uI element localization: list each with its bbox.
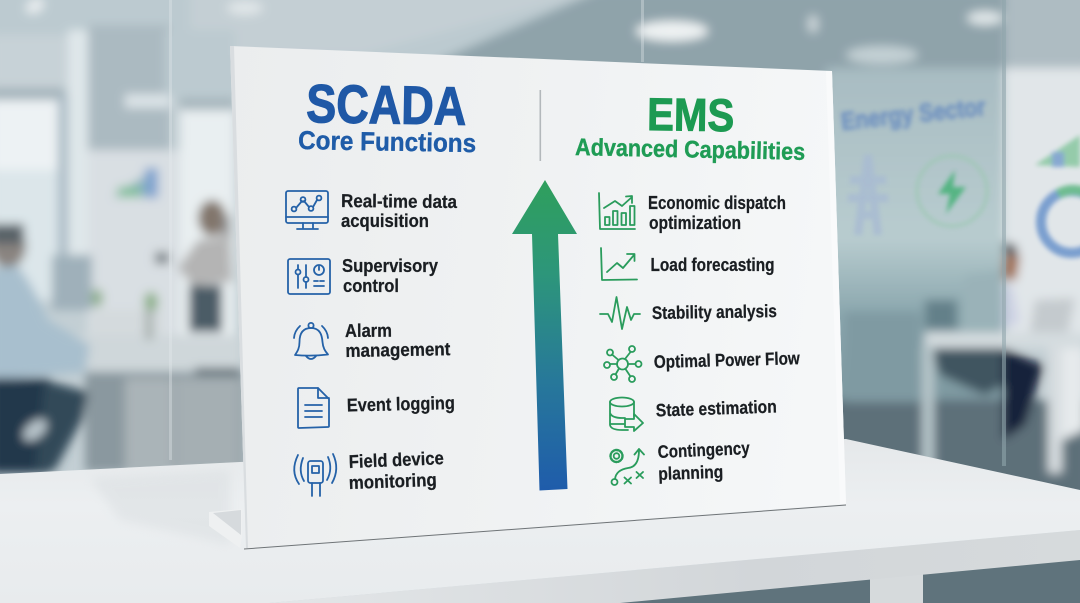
label: Field device	[348, 447, 444, 472]
icon: waveform	[600, 297, 640, 329]
acrylic stand foot	[209, 509, 242, 548]
background: monitor and plants	[52, 255, 162, 340]
subheading: Advanced Capabilities: Advanced Capabilities	[575, 134, 805, 166]
item: Load forecasting	[601, 248, 774, 280]
icon: field sensor	[294, 454, 336, 496]
item: State estimation	[610, 396, 777, 431]
label: Event logging	[347, 392, 455, 415]
label: State estimation	[655, 396, 777, 420]
table leg	[870, 572, 923, 603]
background: ceiling	[0, 0, 1080, 100]
item: Contingency planning: planning	[658, 462, 724, 484]
item: Real-time data acquisition	[286, 190, 458, 231]
arrow: SCADA to EMS	[512, 180, 577, 490]
icon: network hub	[604, 346, 642, 382]
item: Supervisory control	[288, 255, 439, 296]
label: Optimal Power Flow	[654, 348, 801, 372]
label: Contingency	[657, 438, 750, 462]
background: central ceiling lights	[23, 0, 1003, 64]
background: left wall and windows	[0, 25, 235, 350]
label: Stability analysis	[652, 301, 777, 323]
background: right lower furnishings	[830, 242, 1080, 500]
background: right wall	[1004, 68, 1080, 338]
table under front	[560, 555, 1080, 603]
icon: document	[298, 388, 329, 428]
item: Optimal Power Flow	[604, 346, 801, 382]
item: Alarm management	[294, 320, 451, 361]
item: Supervisory control: control	[343, 275, 399, 296]
icon: gear and strategy path	[610, 449, 644, 485]
subheading: Core Functions: Core Functions	[298, 125, 476, 158]
background: wall chart logo	[112, 167, 158, 197]
icon: bar chart with trend	[599, 193, 635, 229]
item: Economic dispatch optimization	[599, 193, 786, 233]
item: Field device monitoring: monitoring	[348, 469, 437, 493]
table front edge	[269, 530, 1080, 603]
table soft shadow	[90, 470, 230, 545]
icon: control panel	[288, 259, 330, 294]
background: standing woman	[155, 200, 232, 332]
panel: SCADA core functions	[286, 74, 476, 496]
table top	[0, 439, 1080, 603]
item: Real-time data acquisition: acquisition	[341, 210, 429, 231]
item: Stability analysis	[600, 297, 777, 329]
background: glass mullions	[169, 0, 1006, 466]
label: Load forecasting	[650, 255, 774, 275]
heading: EMS: EMS	[647, 88, 735, 141]
icon: line chart	[601, 248, 637, 280]
label: Alarm	[345, 320, 392, 341]
background: right glass panel	[826, 68, 1004, 408]
icon: database with arrow	[610, 398, 643, 431]
item: Event logging	[298, 388, 455, 428]
label: Economic dispatch	[648, 193, 786, 213]
divider	[540, 90, 541, 161]
panel: EMS advanced capabilities	[575, 88, 805, 485]
icon: monitor chart	[286, 191, 328, 229]
background: left desk and cabinets	[0, 335, 245, 472]
heading: SCADA: SCADA	[306, 74, 467, 137]
background: Energy Sector wall sign	[840, 93, 1080, 253]
item: Contingency planning	[610, 438, 750, 485]
item: Economic dispatch optimization: optimization	[649, 213, 741, 233]
sign panel	[230, 46, 846, 550]
label: Real-time data	[341, 190, 458, 212]
item: Field device monitoring	[294, 447, 444, 496]
item: Alarm management: management	[345, 338, 451, 361]
background: Energy Sector wall sign: Energy Sector	[840, 93, 987, 136]
background: seated man	[0, 224, 90, 473]
icon: bell	[294, 323, 328, 359]
label: Supervisory	[342, 255, 439, 276]
